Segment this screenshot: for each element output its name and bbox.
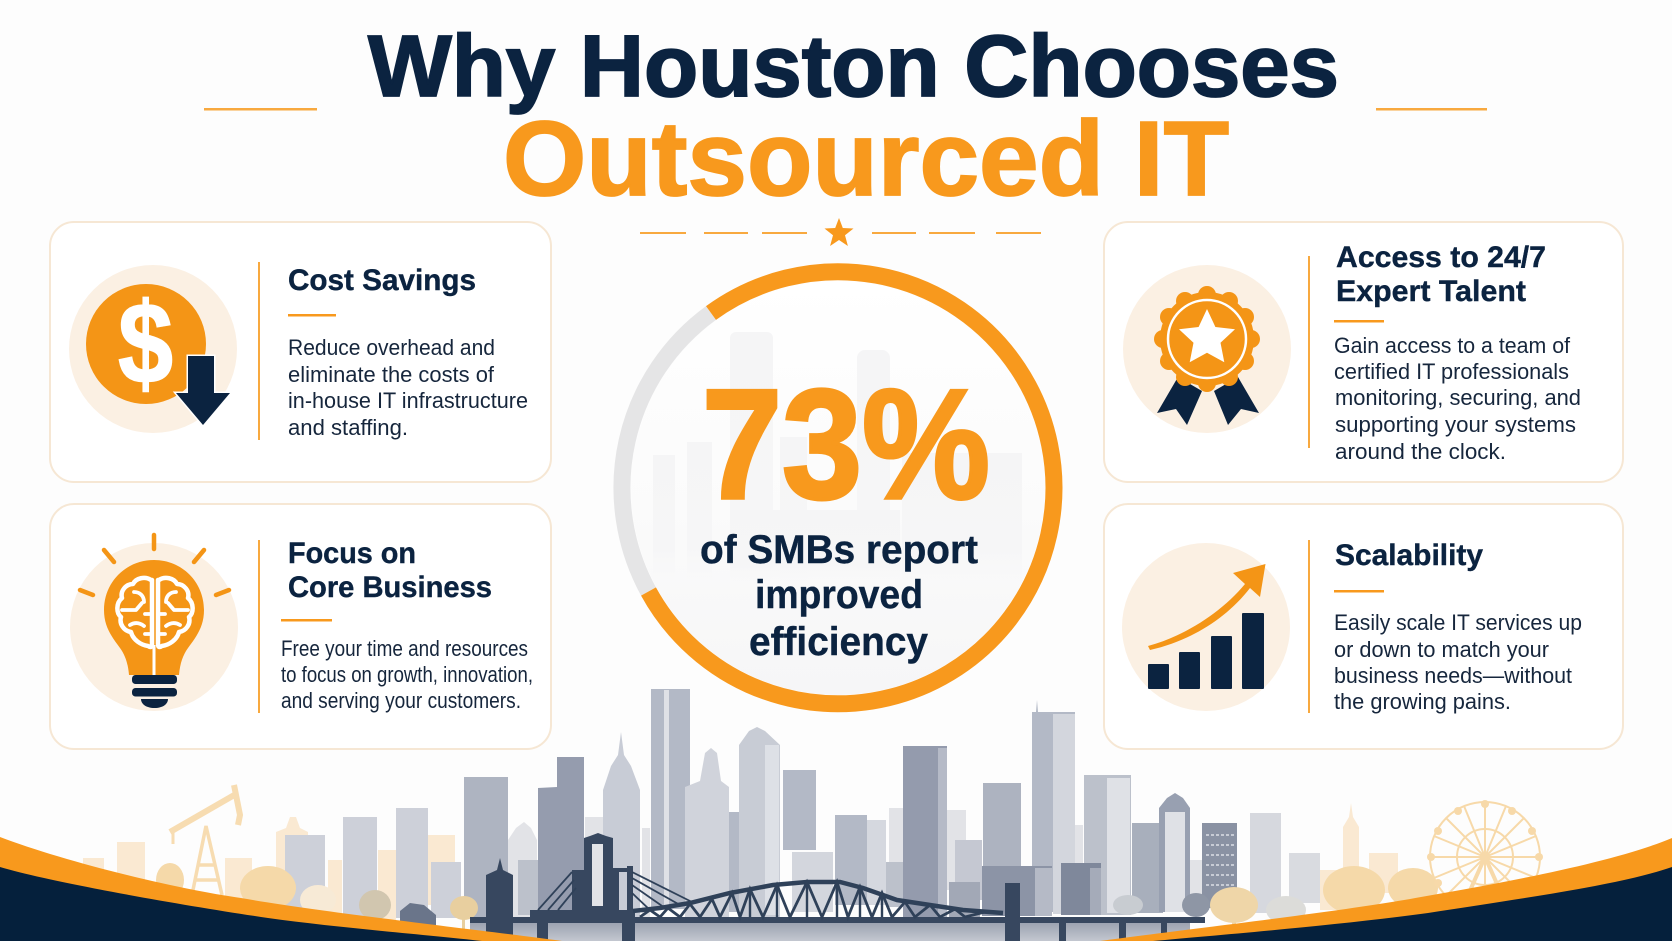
ring remainder [622, 313, 711, 592]
body text: eliminate the costs of [288, 362, 495, 387]
stat caption: efficiency [749, 620, 929, 664]
orange swoosh [1100, 838, 1672, 941]
body text [281, 636, 533, 713]
icon: dollar with down arrow [69, 265, 237, 433]
title [368, 18, 1339, 218]
foreground slate buildings [982, 863, 1101, 916]
title line 2: Outsourced IT [503, 100, 1229, 218]
mid grey buildings [464, 689, 1190, 917]
star divider [640, 218, 1041, 246]
icon: award badge [1123, 265, 1291, 433]
body text: supporting your systems [1335, 412, 1576, 437]
icon: star [824, 218, 854, 246]
body text: monitoring, securing, and [1335, 385, 1581, 410]
panel: access to expert talent [1104, 222, 1623, 482]
body text: the growing pains. [1334, 689, 1511, 714]
heading [288, 537, 492, 604]
icon: growth chart [1122, 543, 1290, 711]
windowed tower [1202, 823, 1237, 908]
title line 1: Why Houston Chooses [368, 18, 1339, 115]
navy band [0, 867, 482, 941]
body text [288, 335, 528, 440]
water band [470, 922, 1190, 941]
dark tower [486, 858, 513, 941]
body text: certified IT professionals [1334, 359, 1569, 384]
body text: around the clock. [1335, 439, 1506, 464]
orange trees [156, 863, 1438, 937]
body text: Easily scale IT services up [1334, 610, 1582, 635]
body text: or down to match your [1334, 637, 1549, 662]
stat caption [700, 528, 978, 664]
stat number: 73% [702, 358, 990, 532]
body text: to focus on growth, innovation, [281, 662, 533, 687]
heading: Expert Talent [1336, 275, 1526, 308]
heading: Access to 24/7 [1336, 241, 1546, 274]
icon: lightbulb with brain [70, 535, 238, 711]
heading [1336, 241, 1546, 308]
small house [400, 903, 436, 927]
panel: scalability [1104, 504, 1623, 749]
body text: Reduce overhead and [288, 335, 495, 360]
body text [1334, 333, 1581, 464]
body text: Free your time and resources [281, 636, 528, 661]
heading: Cost Savings [288, 264, 476, 297]
panel: focus on core business [50, 504, 551, 749]
central stat ring [622, 272, 1054, 704]
bottom wave right [1100, 838, 1672, 941]
body text [1334, 610, 1582, 714]
heading: Focus on [288, 537, 416, 570]
palest grey buildings [508, 808, 1202, 918]
body text: in-house IT infrastructure [288, 388, 528, 413]
pale orange buildings [83, 803, 1398, 920]
grey-brown trees [300, 885, 1306, 924]
orange swoosh [0, 837, 562, 941]
body text: and serving your customers. [281, 688, 521, 713]
title rule left [204, 108, 317, 110]
ferris wheel [1427, 800, 1543, 912]
skyline illustration [83, 689, 1543, 941]
heading: Scalability [1335, 539, 1483, 572]
title rule right [1376, 108, 1487, 110]
icon: dollar with down arrow: $ [118, 280, 173, 408]
heading: Core Business [288, 571, 492, 604]
oil pump jack [170, 785, 240, 895]
ring progress [648, 272, 1054, 704]
lightened tower faces [664, 690, 1185, 918]
stat caption: improved [755, 573, 923, 617]
body text: and staffing. [288, 415, 408, 440]
darker grey buildings [538, 746, 980, 921]
bridge [470, 833, 1205, 941]
body text: business needs—without [1334, 663, 1572, 688]
body text: Gain access to a team of [1334, 333, 1571, 358]
bottom wave left [0, 837, 562, 941]
light grey buildings [285, 732, 1320, 920]
navy band [1153, 867, 1672, 941]
stat caption: of SMBs report [700, 528, 978, 572]
ghost skyline [730, 332, 890, 380]
panel: cost savings [50, 222, 551, 482]
